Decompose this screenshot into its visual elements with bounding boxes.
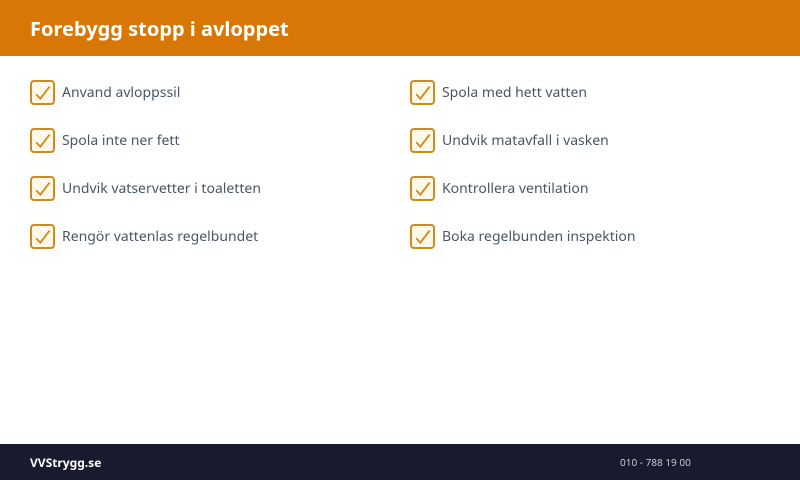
icon: checkbox [30, 176, 55, 201]
brand name: VVStrygg.se [30, 454, 101, 471]
label: Undvik matavfall i vasken [442, 131, 609, 150]
checklist item: Spola med hett vatten [410, 80, 587, 105]
label: Boka regelbunden inspektion [442, 227, 636, 246]
checklist item: Boka regelbunden inspektion [410, 224, 636, 249]
icon: checkbox [30, 80, 55, 105]
checklist item: Rengör vattenlas regelbundet [30, 224, 258, 249]
footer bar [0, 444, 800, 480]
phone number: 010 - 788 19 00 [620, 455, 691, 469]
icon: checkbox [30, 128, 55, 153]
checklist item: Undvik matavfall i vasken [410, 128, 609, 153]
label: Spola med hett vatten [442, 83, 587, 102]
checklist item: Anvand avloppssil [30, 80, 180, 105]
icon: checkbox [410, 176, 435, 201]
label: Undvik vatservetter i toaletten [62, 179, 261, 198]
title: Forebygg stopp i avloppet [30, 15, 289, 42]
label: Spola inte ner fett [62, 131, 180, 150]
checklist item: Spola inte ner fett [30, 128, 180, 153]
label: Kontrollera ventilation [442, 179, 589, 198]
checklist item: Kontrollera ventilation [410, 176, 589, 201]
header banner [0, 0, 800, 56]
icon: checkbox [410, 128, 435, 153]
icon: checkbox [30, 224, 55, 249]
label: Anvand avloppssil [62, 83, 180, 102]
checklist item: Undvik vatservetter i toaletten [30, 176, 261, 201]
icon: checkbox [410, 80, 435, 105]
label: Rengör vattenlas regelbundet [62, 227, 258, 246]
icon: checkbox [410, 224, 435, 249]
